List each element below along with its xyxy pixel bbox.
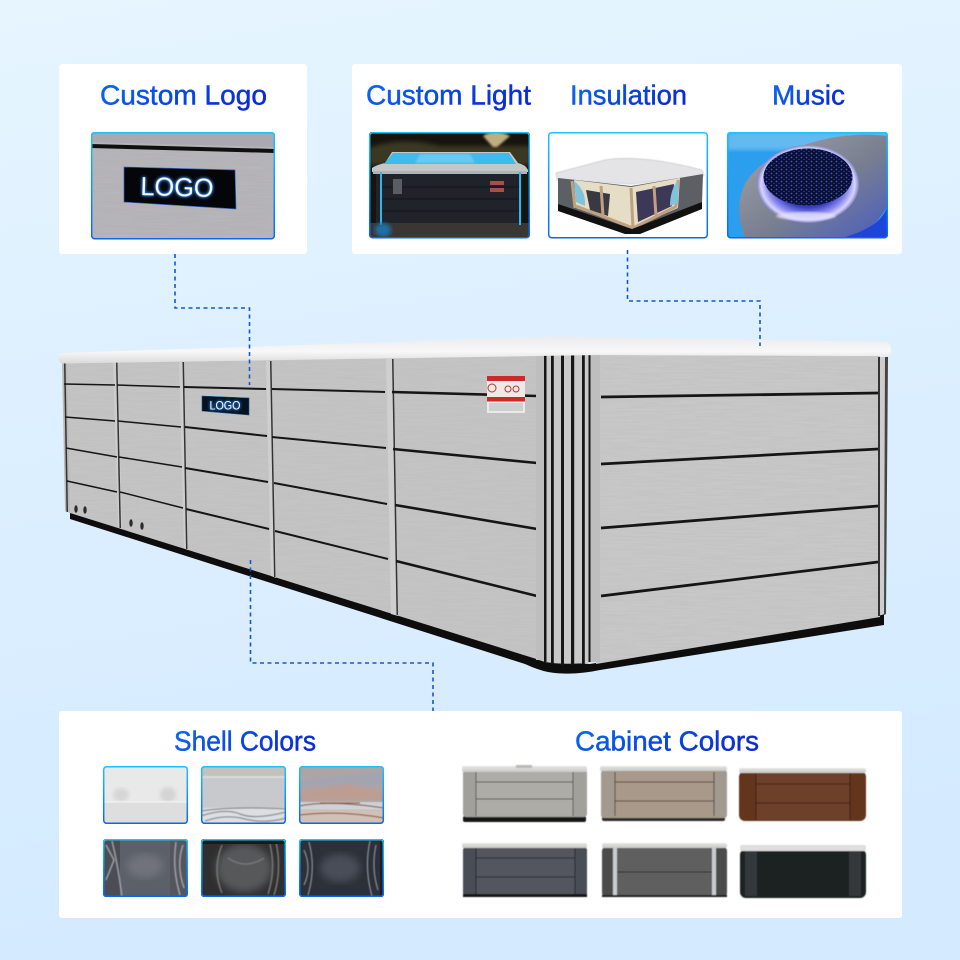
corner trim with stripes [536,354,600,665]
cabinet: taupe [600,766,727,821]
heading: cabinet colors: Cabinet Colors [575,726,759,756]
right cabinet face [596,355,880,664]
drain fittings [74,505,144,530]
image: logo close-up [91,132,275,239]
logo plate on cabinet: LOGO [210,400,241,412]
cabinet: graphite [602,843,727,897]
connector: logo callout [175,254,250,385]
heading: shell colors: Shell Colors [174,726,316,756]
vertical panel posts on the left face [62,359,398,616]
panel: features [352,64,902,254]
logo plate on cabinet [202,396,249,415]
swatch: slate marble [103,839,188,897]
connector: colors callout [250,560,433,711]
top rim [59,336,891,364]
cabinet: black [740,845,866,898]
swatch: black marble [299,839,384,897]
swatch: grey marble [201,766,286,824]
swatch: white marble [103,766,188,824]
cabinet: walnut [739,768,866,821]
image: underwater speaker [727,132,888,238]
panel: custom logo [59,64,307,254]
horizontal grooves, left face [64,384,537,596]
panel: colors [59,711,902,918]
heading: custom logo: Custom Logo [100,80,267,110]
image: logo close-up: LOGO [140,173,214,203]
image: lit spa at night [369,132,530,238]
cabinet: ash grey [462,843,587,897]
base plinth [70,510,884,674]
connector: features callout [628,250,760,346]
warning label [487,376,525,413]
heading: music: Music [772,80,845,110]
main product: swim spa cabinet [59,336,891,674]
left cabinet face [62,354,546,662]
swatch: charcoal marble [201,839,286,897]
swatch: rose marble [299,766,384,824]
heading: custom light: Custom Light [366,80,531,110]
cabinet: light grey [462,765,587,822]
horizontal grooves, right face [601,393,878,596]
heading: insulation: Insulation [570,80,687,110]
image: insulation cutaway [548,132,708,238]
right end post [878,357,888,616]
